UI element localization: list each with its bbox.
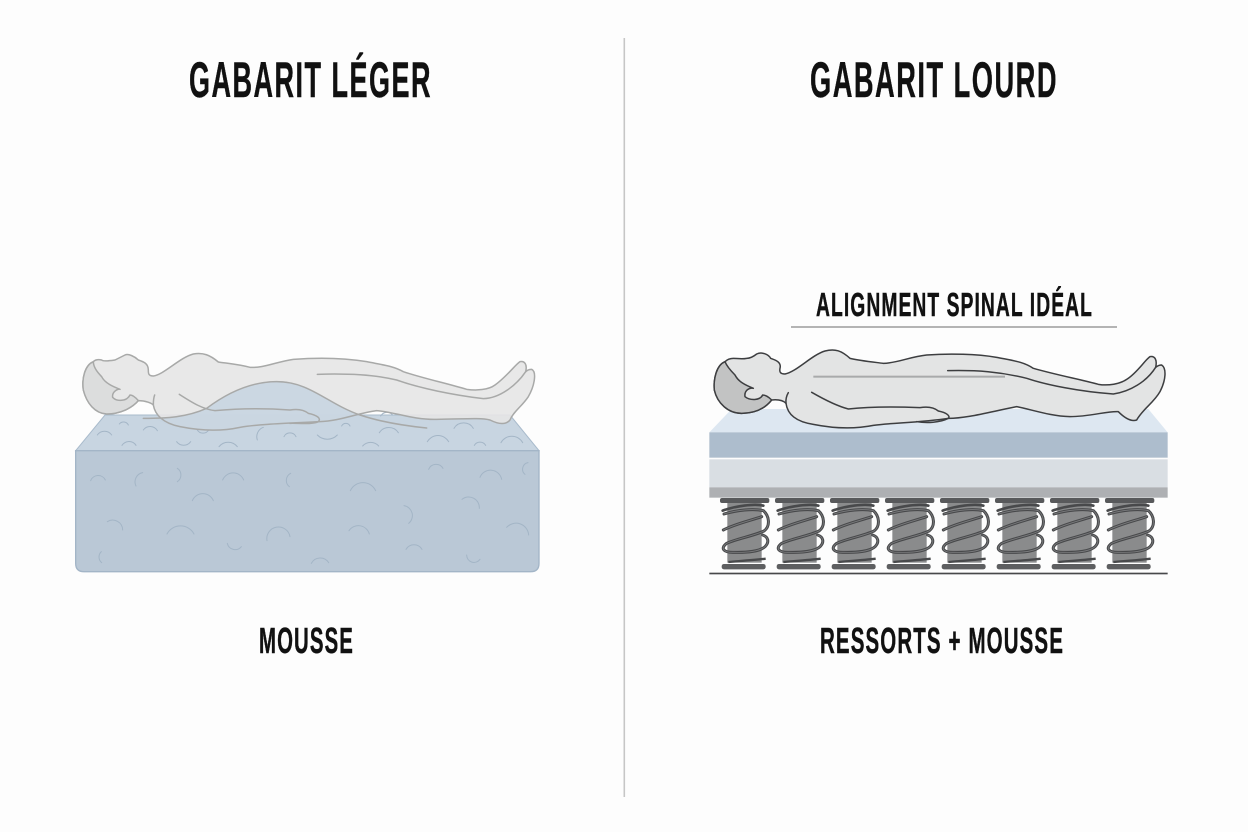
heading: gabarit léger: GABARIT LÉGER xyxy=(189,52,432,108)
panel: gabarit lourd xyxy=(709,52,1168,661)
panel: gabarit léger xyxy=(76,52,539,661)
springs xyxy=(720,498,1154,569)
central divider xyxy=(624,38,625,797)
label: mousse: MOUSSE xyxy=(259,620,354,661)
body aligned on mattress xyxy=(714,350,1165,428)
label: ressorts + mousse: RESSORTS + MOUSSE xyxy=(820,620,1064,661)
foam mattress xyxy=(76,412,539,572)
alignment line xyxy=(791,326,1117,328)
hybrid mattress xyxy=(709,409,1168,574)
body sinking into foam xyxy=(83,354,535,430)
